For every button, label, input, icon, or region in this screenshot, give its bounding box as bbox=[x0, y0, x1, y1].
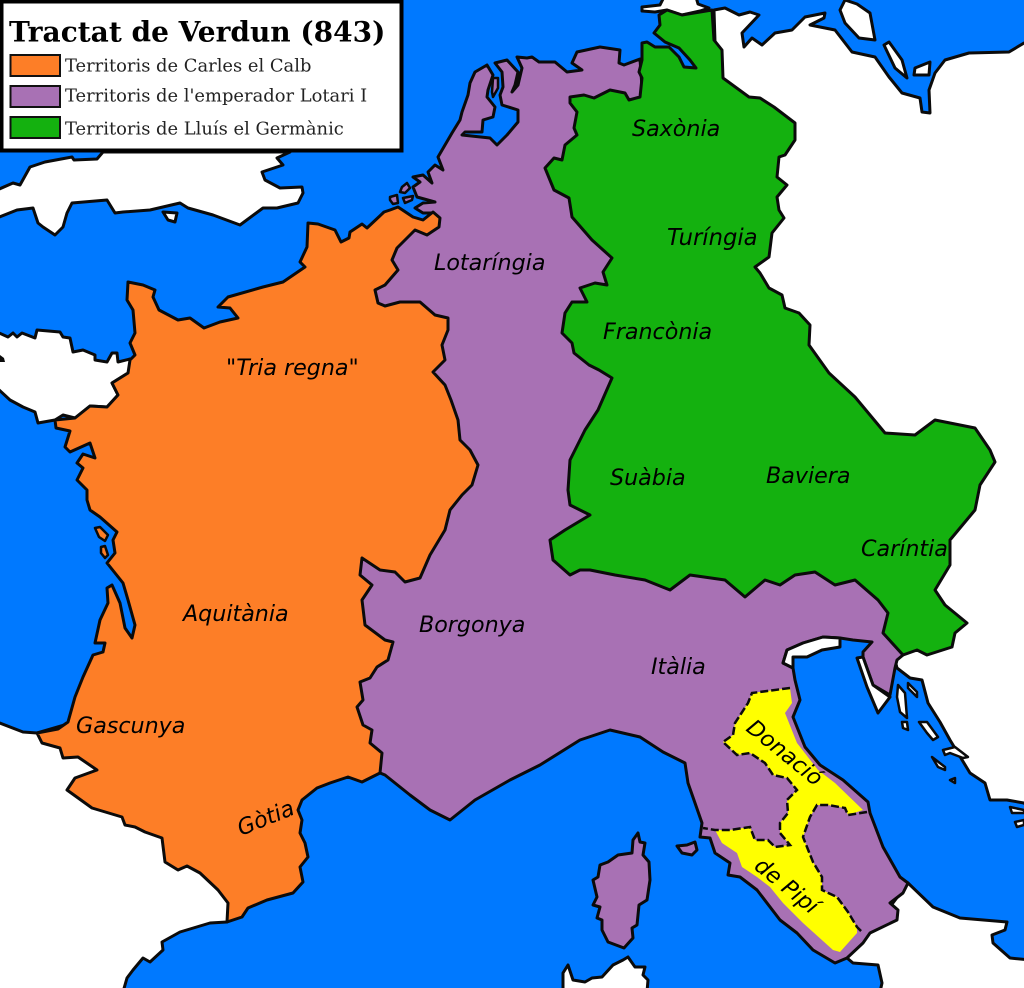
Corsica bbox=[593, 833, 650, 948]
label: Donació: Donació bbox=[741, 714, 828, 791]
label: Gascunya: Gascunya bbox=[76, 713, 185, 739]
label: Baviera: Baviera bbox=[766, 463, 850, 489]
land: Iberia bbox=[0, 700, 300, 988]
legend swatch: Lotari bbox=[10, 86, 60, 107]
land: Baltic islands bbox=[840, 0, 930, 78]
label: Borgonya: Borgonya bbox=[419, 612, 525, 638]
legend text: Lotari: Territoris de l'emperador Lotari I bbox=[65, 86, 367, 106]
label: Turíngia: Turíngia bbox=[667, 225, 758, 251]
label: Caríntia: Caríntia bbox=[861, 536, 948, 562]
territory: Louis the German bbox=[545, 10, 995, 655]
Elba bbox=[677, 842, 697, 855]
legend swatch: Carles bbox=[10, 55, 60, 76]
land: Denmark islands bbox=[642, 0, 709, 15]
legend text: Carles: Territoris de Carles el Calb bbox=[65, 56, 311, 76]
land: Isle of Wight bbox=[163, 212, 177, 222]
Adriatic islands bbox=[897, 683, 1024, 827]
label: Gòtia: Gòtia bbox=[234, 795, 298, 842]
label: Tria regna: "Tria regna" bbox=[226, 355, 359, 381]
land: Sardinia bbox=[563, 957, 648, 988]
land: Balkan south / Calabria bbox=[847, 883, 1024, 988]
legend bbox=[2, 2, 402, 150]
label: Lotaríngia: Lotaríngia bbox=[434, 250, 545, 276]
legend title: Tractat de Verdun (843) bbox=[9, 16, 385, 48]
legend swatch: Lluís bbox=[10, 117, 60, 138]
legend panel bbox=[2, 2, 402, 150]
legend text: Lluís: Territoris de Lluís el Germànic bbox=[65, 118, 344, 140]
land: Brittany bbox=[0, 330, 135, 423]
label: Aquitània: Aquitània bbox=[181, 601, 289, 627]
label: Itàlia: Itàlia bbox=[651, 654, 706, 680]
land: Britain bbox=[0, 152, 303, 235]
label: Suàbia: Suàbia bbox=[610, 465, 686, 491]
territory: Charles the Bald bbox=[37, 207, 478, 922]
territory: Donation of Pepin bbox=[703, 688, 867, 952]
Frisian lagoon islet bbox=[492, 78, 498, 97]
territory: Lothair I bbox=[300, 47, 908, 963]
label: de Pipí: de Pipí bbox=[749, 852, 826, 921]
Zeeland islands bbox=[400, 183, 410, 193]
label: Saxònia: Saxònia bbox=[632, 116, 720, 142]
label: Francònia: Francònia bbox=[603, 319, 712, 345]
land: eastern Europe bbox=[714, 8, 1024, 808]
Venetian lagoon land bbox=[783, 637, 840, 668]
speck: islet at Brittany edge bbox=[0, 355, 5, 362]
Istria west land bbox=[857, 657, 890, 713]
region labels bbox=[76, 116, 948, 921]
Atlantic islands bbox=[95, 527, 108, 541]
